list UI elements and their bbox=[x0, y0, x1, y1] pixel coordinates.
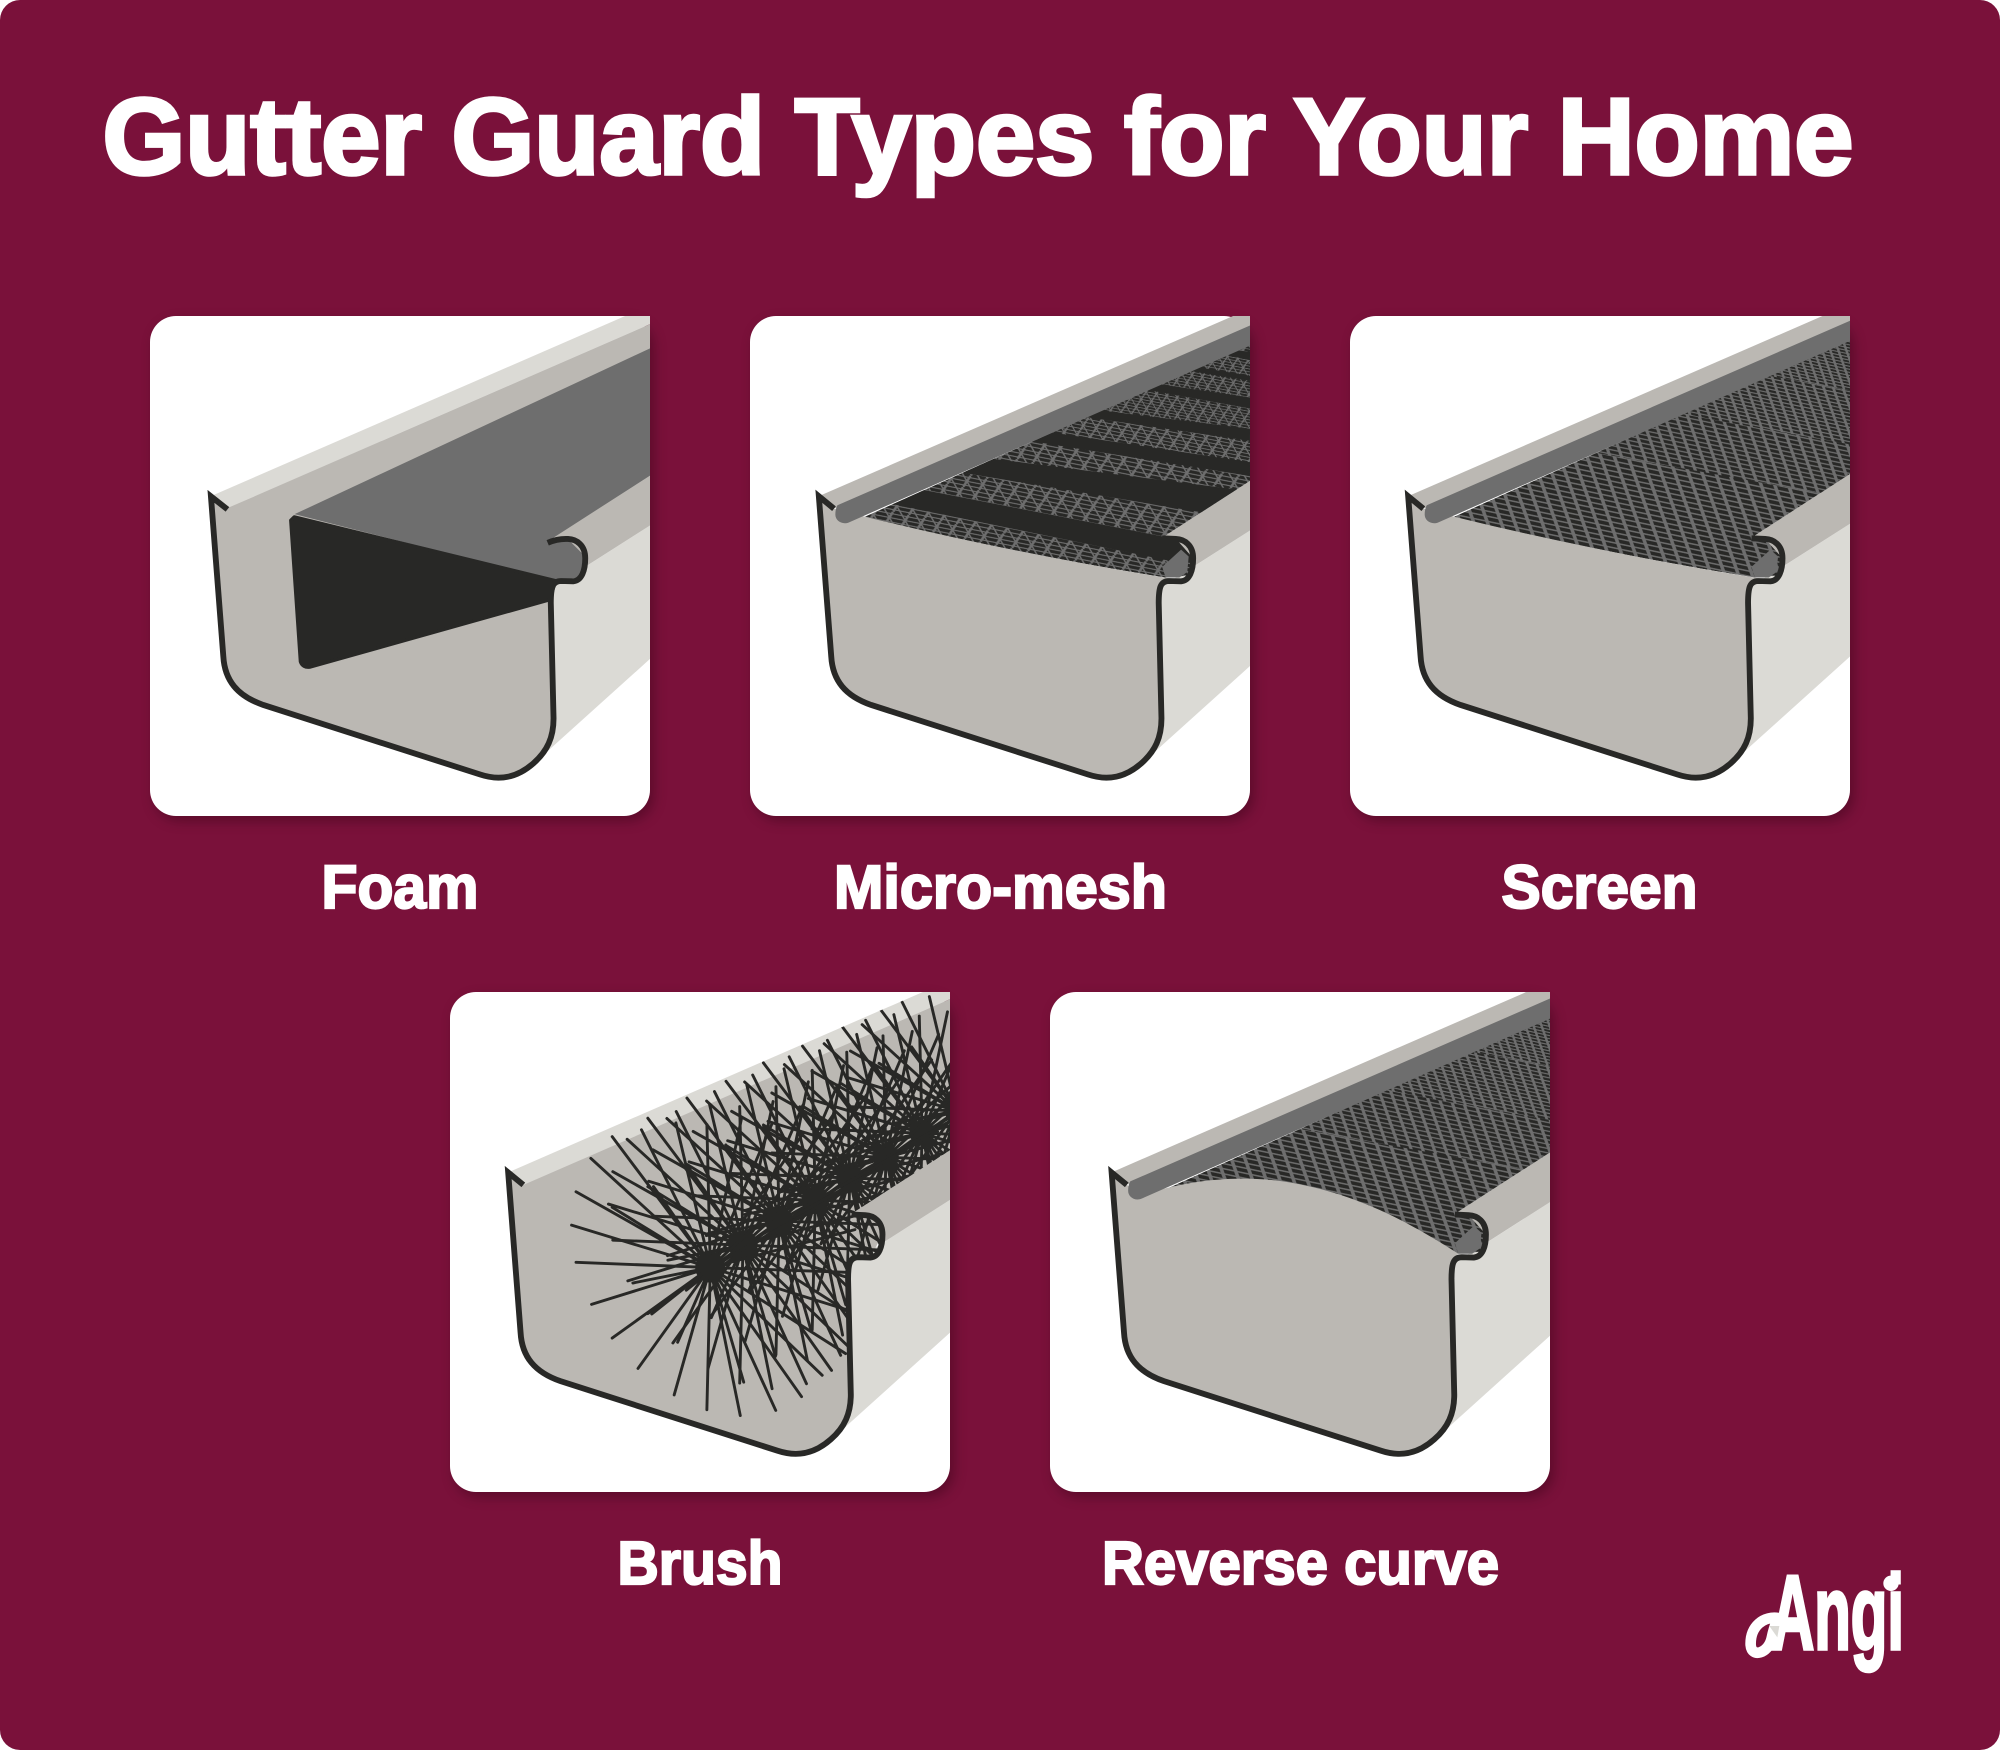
top rail bbox=[835, 326, 1250, 524]
front face bbox=[819, 496, 1169, 778]
hook end bbox=[1751, 550, 1778, 578]
panel: reverse curve gutter guard bbox=[1050, 992, 1558, 1501]
panel: micro-mesh gutter guard bbox=[750, 316, 1258, 825]
mesh with dark ribs bbox=[864, 346, 1250, 578]
label: reverse curve: Reverse curve bbox=[1102, 1529, 1499, 1597]
screen mesh behind curve bbox=[1170, 1018, 1550, 1254]
panel: foam gutter guard bbox=[150, 295, 680, 816]
illustration: foam gutter bbox=[211, 295, 680, 778]
curved front hood bbox=[1112, 1172, 1458, 1454]
card background: brush bbox=[450, 992, 950, 1492]
panel: brush gutter guard bbox=[450, 992, 958, 1501]
gutter outline bbox=[508, 1172, 882, 1454]
card background: foam bbox=[150, 316, 650, 816]
hook fill bbox=[850, 1218, 878, 1258]
logo wordmark: Angi bbox=[1771, 1554, 1904, 1672]
panel: screen gutter guard bbox=[1350, 316, 1858, 825]
front face bbox=[1408, 496, 1758, 778]
logo loop and dot bbox=[1751, 1576, 1899, 1653]
card background: reverse curve bbox=[1050, 992, 1550, 1492]
top rail bbox=[1128, 998, 1550, 1200]
label: micro-mesh: Micro-mesh bbox=[834, 853, 1167, 921]
foam insert top bbox=[294, 348, 650, 579]
foam insert front bbox=[291, 517, 555, 667]
hook end bbox=[1162, 550, 1189, 578]
brush bristle tufts bbox=[570, 995, 950, 1417]
label: brush: Brush bbox=[618, 1529, 782, 1597]
label: screen: Screen bbox=[1502, 853, 1698, 921]
gutter outline bbox=[1408, 496, 1782, 778]
card background: micro-mesh bbox=[750, 316, 1250, 816]
title: Gutter Guard Types for Your Home bbox=[102, 76, 1854, 198]
logo: Angi bbox=[1751, 1554, 1904, 1672]
illustration: micro-mesh gutter bbox=[815, 316, 1250, 781]
top rail bbox=[1424, 320, 1850, 524]
screen mesh bbox=[1454, 340, 1850, 578]
hook end bbox=[1455, 1226, 1481, 1254]
illustration: screen gutter bbox=[1404, 316, 1850, 781]
card background: screen bbox=[1350, 316, 1850, 816]
illustration: reverse curve gutter bbox=[1108, 992, 1550, 1457]
label: foam: Foam bbox=[322, 853, 478, 921]
gutter outline bbox=[1112, 1172, 1486, 1454]
gutter outline bbox=[211, 496, 585, 778]
illustration: brush gutter bbox=[504, 992, 950, 1457]
gutter outline bbox=[819, 496, 1193, 778]
